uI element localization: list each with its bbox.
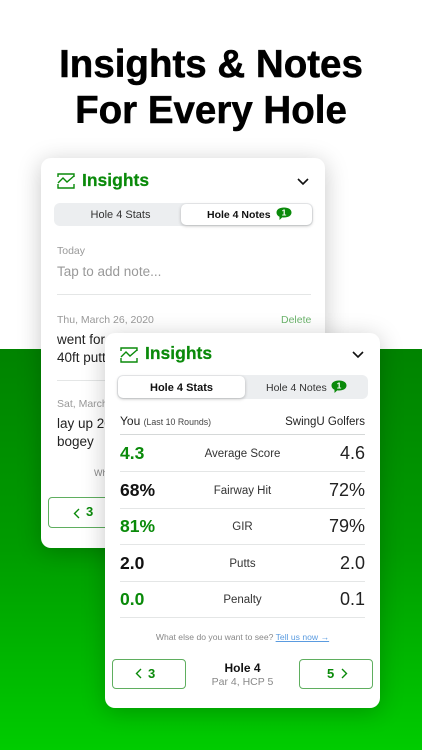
title: Insights & Notes <box>59 43 363 86</box>
text: note 2: bogey <box>57 434 94 449</box>
text: note 2 <box>57 416 112 449</box>
icon: chevron <box>352 351 364 358</box>
row: average score: 4.3 <box>120 443 144 463</box>
text: feedback fragment: What <box>94 468 115 478</box>
tab: stats: Hole 4 Stats <box>91 209 150 221</box>
label: 5 <box>327 666 334 681</box>
label: 3 <box>148 666 155 681</box>
row: gir: 81% <box>120 516 155 536</box>
row: gir <box>120 516 365 536</box>
button: next hole <box>299 659 373 689</box>
row: penalty: Penalty <box>223 594 262 606</box>
text: note 1: went for <box>57 332 105 347</box>
tab label: Hole 4 Stats <box>150 382 213 394</box>
text: note 2: lay up 20 <box>57 416 112 431</box>
row: penalty: 0.1 <box>340 589 365 609</box>
text: date 2: Sat, March 7 <box>57 398 117 410</box>
par and handicap: Par 4, HCP 5 <box>212 676 273 688</box>
text: today: Today <box>57 245 85 257</box>
tabs <box>54 203 313 226</box>
tab: notes: Hole 4 Notes <box>266 382 327 394</box>
text: feedback prompt: What else do you want to see? Tell us now → <box>156 632 329 642</box>
row: fairway hit <box>120 480 365 500</box>
hole number: Hole 4 <box>224 661 260 675</box>
text: date 1: Thu, March 26, 2020 <box>57 314 154 326</box>
background: green gradient lower band <box>0 349 422 750</box>
row: fairway hit: Fairway Hit <box>214 485 271 497</box>
row: penalty: 0.0 <box>120 589 144 609</box>
tab label: Hole 4 Notes <box>207 209 271 221</box>
table header: you: You (Last 10 Rounds) <box>120 414 211 428</box>
tabs <box>117 375 368 399</box>
text: note 1 <box>57 332 106 365</box>
badge <box>276 208 292 220</box>
row: fairway hit: 72% <box>329 480 365 500</box>
row: gir: GIR <box>232 521 253 533</box>
icon: insights chart <box>57 173 75 189</box>
table header: golfers: SwingU Golfers <box>285 416 365 428</box>
icon: insights chart <box>120 347 138 363</box>
badge: 1 <box>282 208 287 218</box>
title <box>59 43 363 132</box>
icon: right chevron <box>342 668 348 678</box>
panel: hole stats card <box>105 333 380 708</box>
text: note 1: 40ft putt <box>57 350 106 365</box>
row: average score: 4.6 <box>340 443 365 463</box>
text: delete: Delete <box>281 314 311 326</box>
badge: 1 <box>337 381 342 391</box>
title: For Every Hole <box>75 89 347 132</box>
row: putts: 2.0 <box>340 553 365 573</box>
icon: left chevron <box>74 508 80 518</box>
row: putts: Putts <box>229 558 256 570</box>
button: previous hole <box>112 659 186 689</box>
icon: chevron <box>298 178 308 186</box>
text: note placeholder: Tap to add note... <box>57 264 161 279</box>
row: putts: 2.0 <box>120 553 144 573</box>
row: putts <box>120 553 365 573</box>
badge <box>332 380 346 393</box>
button: previous <box>48 497 128 528</box>
row: average score: Average Score <box>205 448 280 460</box>
tab: stats active <box>118 376 245 398</box>
text: hole info <box>212 661 273 688</box>
heading: Insights: Insights <box>82 170 149 190</box>
row: average score <box>120 443 365 463</box>
panel: hole notes card <box>41 158 325 548</box>
row: gir: 79% <box>329 516 365 536</box>
label: 3 <box>86 504 93 519</box>
tab: notes active <box>181 204 312 225</box>
row: penalty <box>120 589 365 609</box>
heading: Insights: Insights <box>145 343 212 363</box>
icon: left chevron <box>136 668 142 678</box>
row: fairway hit: 68% <box>120 480 155 500</box>
